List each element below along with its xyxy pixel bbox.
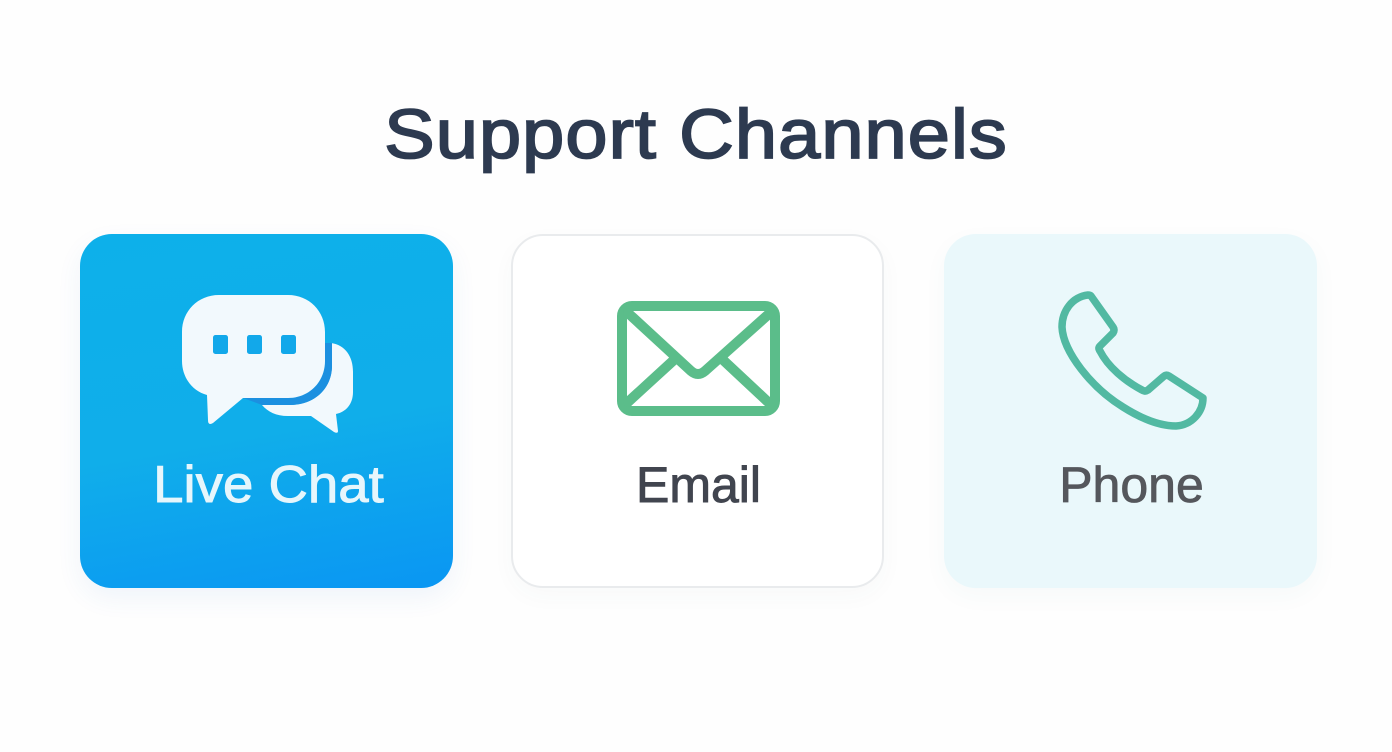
- icon: phone handset: [1058, 291, 1207, 430]
- label: live chat: Live Chat: [153, 456, 384, 514]
- small back bubble: [262, 343, 353, 433]
- panel: phone: [944, 234, 1317, 588]
- bubble shadow crescent: [243, 343, 332, 405]
- label: email: Email: [636, 457, 761, 513]
- bubble dots: [213, 335, 296, 354]
- panel: live chat: [80, 234, 453, 588]
- title: Support Channels: [384, 95, 1008, 173]
- icon: chat bubbles: [182, 295, 353, 433]
- icon: envelope: [617, 301, 780, 416]
- large front bubble: [182, 295, 325, 424]
- label: phone: Phone: [1059, 457, 1204, 513]
- panel: email: [511, 234, 884, 588]
